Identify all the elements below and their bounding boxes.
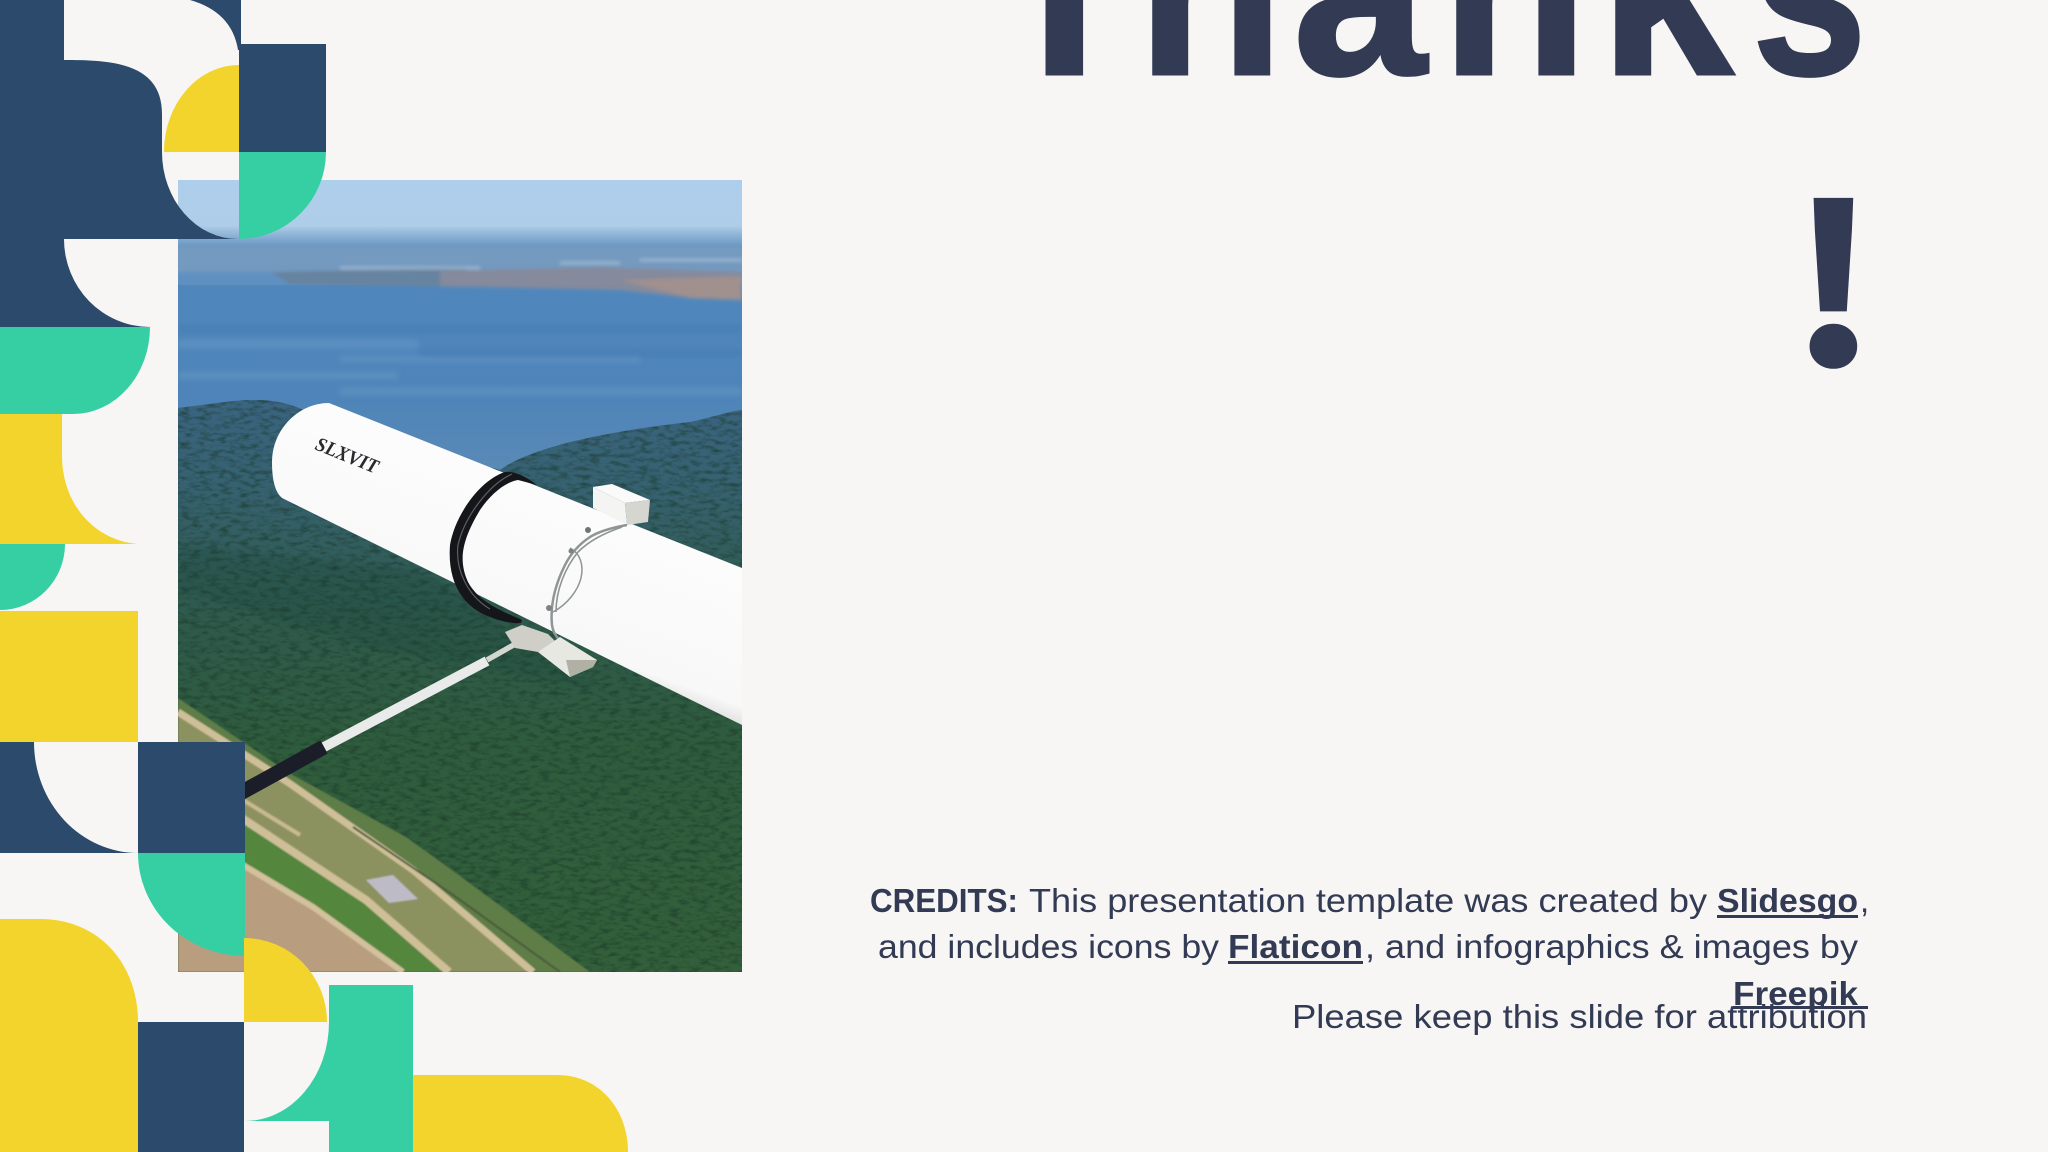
credits line 1: CREDITS: (870, 882, 1018, 919)
yellow quarter bottom (244, 938, 327, 1022)
green quarter top (239, 152, 326, 239)
navy top corner (190, 0, 241, 50)
geometric pattern: left column (0, 0, 628, 1152)
lettering on tube: SLXVIT (312, 433, 382, 479)
green column bottom (245, 985, 413, 1152)
support pole (235, 643, 517, 796)
credits line 2: and includes icons by (878, 928, 1220, 965)
mounting bracket (505, 625, 597, 677)
credits line 2 (878, 928, 1859, 965)
yellow concave block (0, 414, 137, 544)
sea (178, 285, 742, 485)
black cable ring (450, 472, 537, 623)
yellow rectangle (0, 611, 138, 742)
forested hills (178, 400, 742, 972)
attribution note: Please keep this slide for attribution (1292, 998, 1867, 1035)
credits line 2: , and infographics & images by (1365, 928, 1859, 965)
navy square middle (138, 742, 245, 853)
sky (178, 180, 742, 285)
wire clamp (546, 525, 627, 642)
tree canopy texture (178, 400, 742, 972)
credits line 1: , (1860, 882, 1869, 919)
title: ! (1789, 113, 1878, 426)
yellow rounded block bottom (413, 1075, 628, 1152)
title (991, 0, 1878, 426)
farmland strip (178, 698, 590, 972)
credits text (870, 882, 1869, 1035)
sensor box (593, 484, 650, 525)
navy square bottom (138, 1022, 244, 1152)
green quarter middle (138, 853, 245, 956)
yellow quarter top (164, 65, 239, 152)
credits line 1: Slidesgo (1717, 882, 1858, 919)
credits line 2: Flaticon (1228, 928, 1363, 965)
white turbine tube (272, 403, 742, 725)
small green quarter (0, 544, 65, 610)
credits line 3: Freepik (1733, 975, 1859, 1012)
credits line 1: This presentation template was created by (1029, 882, 1708, 919)
photo: wind turbine blade over coast and forest (178, 180, 742, 972)
navy rounded block top (0, 0, 238, 327)
green band (0, 327, 150, 414)
navy concave block (0, 742, 138, 853)
large yellow rounded block (0, 919, 138, 1152)
distant shoreline (170, 246, 750, 300)
navy square top (239, 44, 326, 152)
credits line 1 (870, 882, 1869, 919)
